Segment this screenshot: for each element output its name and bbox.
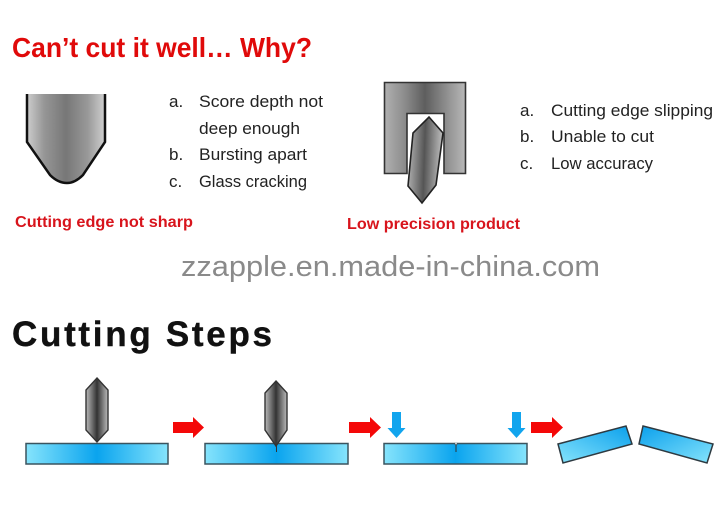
step 3: pressing the scored glass bbox=[384, 412, 527, 464]
list: blunt edge problems: b. bbox=[169, 145, 183, 164]
list: blunt edge problems: Score depth not bbox=[199, 92, 323, 111]
step 1: cutter above glass bbox=[26, 378, 168, 464]
arrow: step 2 to 3 bbox=[349, 417, 381, 438]
list: blunt edge problems: deep enough bbox=[199, 119, 300, 138]
list: low precision problems: b. bbox=[520, 127, 534, 146]
caption: low precision product: Low precision product bbox=[347, 216, 520, 233]
list: low precision problems bbox=[520, 101, 713, 173]
list: low precision problems: c. bbox=[520, 154, 533, 173]
list: blunt edge problems bbox=[169, 92, 323, 191]
step 2: cutter scoring glass bbox=[205, 381, 348, 464]
list: low precision problems: a. bbox=[520, 101, 534, 120]
list: blunt edge problems: c. bbox=[169, 172, 182, 191]
arrow: right press bbox=[508, 412, 526, 438]
list: blunt edge problems: Glass cracking bbox=[199, 172, 307, 191]
step 4: glass broken in two bbox=[558, 426, 713, 463]
arrow: left press bbox=[388, 412, 406, 438]
list: blunt edge problems: a. bbox=[169, 92, 183, 111]
arrow: step 1 to 2 bbox=[173, 417, 204, 438]
list: low precision problems: Cutting edge slipping bbox=[551, 101, 713, 120]
icon: blunt cutting edge bbox=[27, 94, 105, 183]
list: low precision problems: Low accuracy bbox=[551, 154, 653, 173]
list: low precision problems: Unable to cut bbox=[551, 127, 654, 146]
watermark: zzapple.en.made-in-china.com bbox=[181, 251, 600, 283]
list: blunt edge problems: Bursting apart bbox=[199, 145, 307, 164]
title: Can't cut it well: Can’t cut it well… Why? bbox=[12, 32, 312, 63]
caption: cutting edge not sharp: Cutting edge not sharp bbox=[15, 214, 193, 231]
heading: cutting steps: Cutting Steps bbox=[12, 315, 272, 354]
arrow: step 3 to 4 bbox=[531, 417, 563, 438]
icon: holder with tilted cutter bbox=[384, 82, 466, 203]
